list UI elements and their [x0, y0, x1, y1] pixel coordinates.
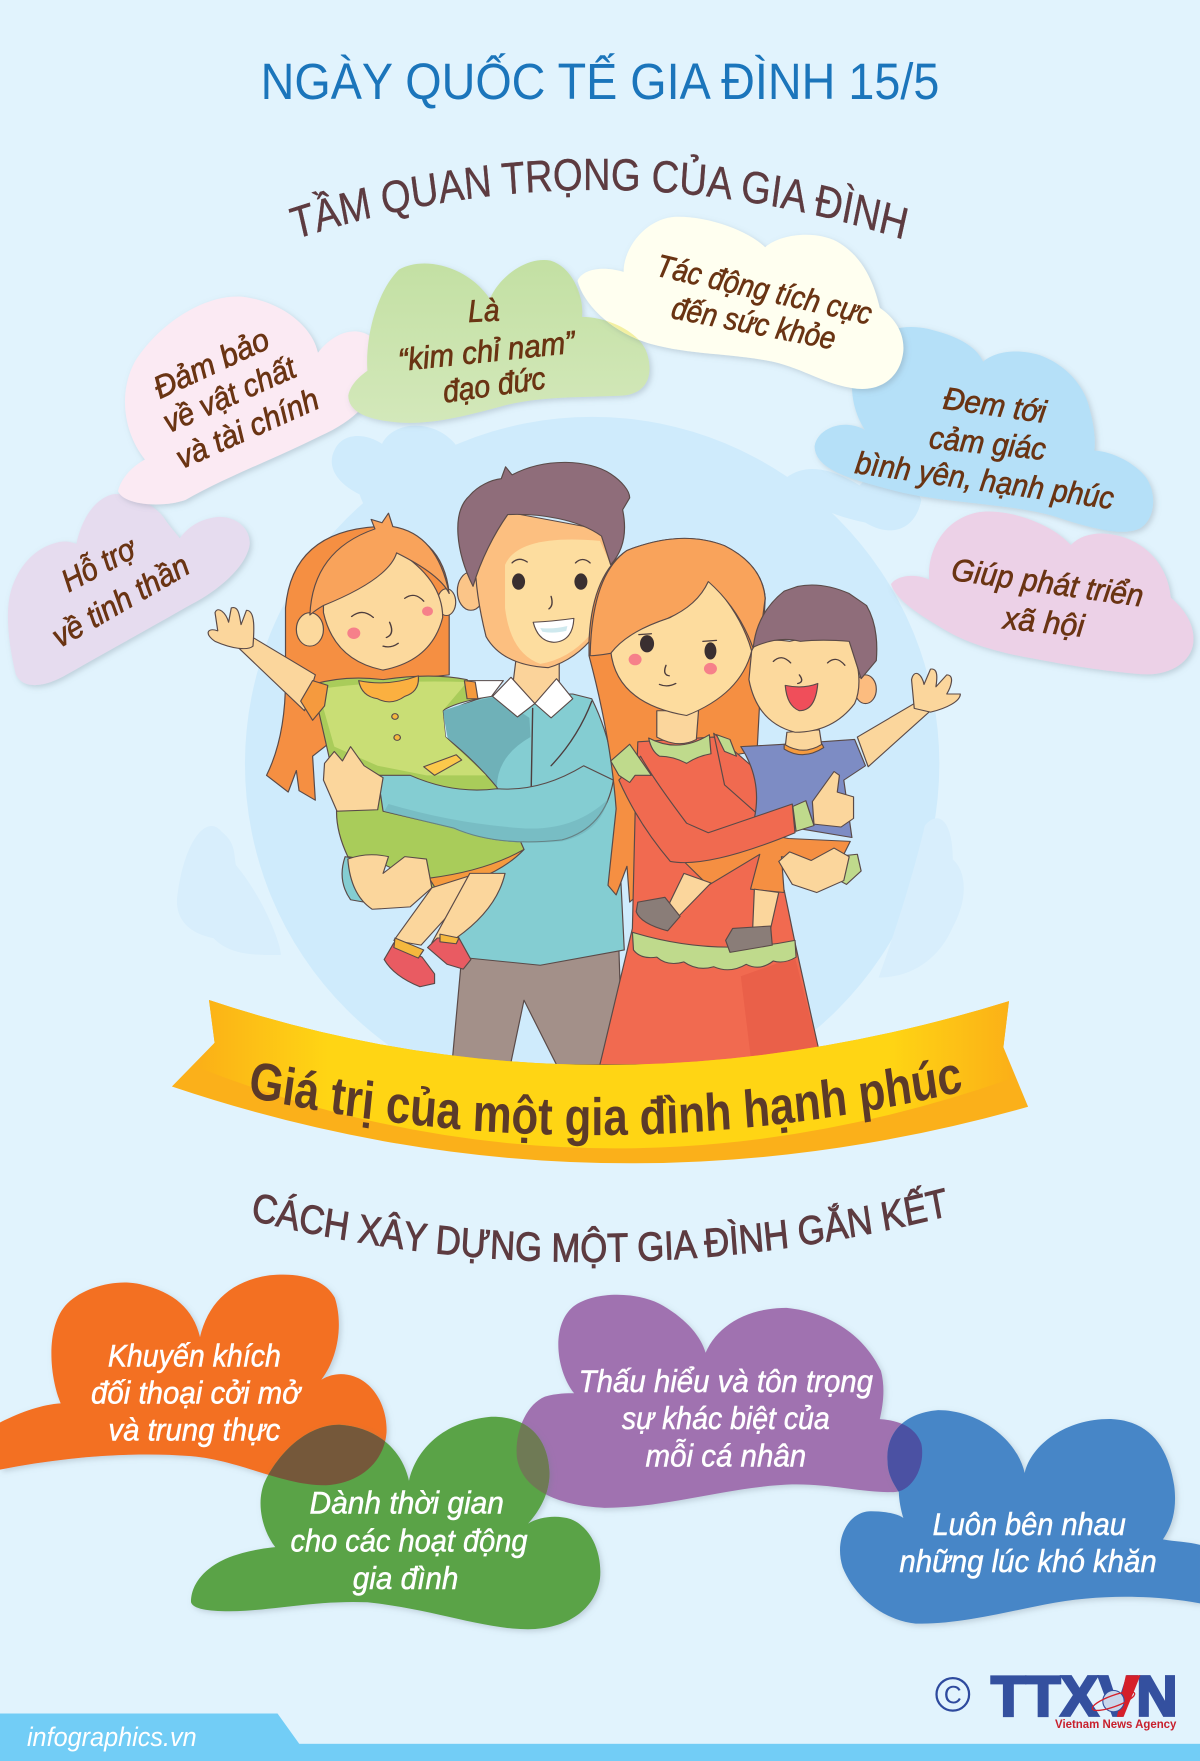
cloud: understanding differences: [517, 1295, 922, 1508]
cloud: understanding differences: mỗi cá nhân: [646, 1438, 806, 1473]
cloud: positive health impact: đến sức khỏe: [669, 290, 839, 356]
cloud: spend time on family activities: gia đình: [353, 1561, 458, 1596]
boy: [636, 585, 960, 952]
logo: TTXVN with copyright: TTXVN: [991, 1665, 1178, 1728]
logo: TTXVN with copyright: C: [944, 1682, 962, 1709]
cloud: understanding differences: sự khác biệt của: [622, 1401, 830, 1436]
cloud: peace and happiness: [815, 327, 1153, 532]
cloud: spend time on family activities: cho các hoạt động: [290, 1524, 528, 1559]
cloud: peace and happiness: Đem tới: [941, 381, 1049, 430]
cloud: social development: [891, 512, 1194, 674]
cloud: moral compass: [348, 260, 650, 423]
banner ribbon: [172, 1000, 1028, 1164]
father: [443, 462, 630, 1065]
title: NGÀY QUỐC TẾ GIA ĐÌNH 15/5: [261, 53, 939, 110]
cloud: encourage open dialogue: và trung thực: [108, 1412, 281, 1447]
cloud: moral compass: Là: [467, 293, 500, 329]
father's hands and arm: [323, 747, 613, 909]
family illustration: [208, 462, 960, 1065]
girl: [208, 513, 524, 987]
cloud: material and financial security: và tài chính: [171, 382, 324, 476]
cloud: peace and happiness: cảm giác: [928, 420, 1048, 467]
cloud: encourage open dialogue: Khuyến khích: [108, 1338, 281, 1373]
cloud: spend time on family activities: Dành thời gian: [310, 1485, 504, 1520]
cloud: peace and happiness: bình yên, hạnh phúc: [853, 445, 1116, 516]
cloud: understanding differences: Thấu hiểu và tôn trọng: [579, 1364, 874, 1399]
cloud: spiritual support: về tinh thần: [46, 548, 196, 654]
cloud: moral compass: “kim chỉ nam”: [396, 325, 578, 378]
cloud: social development: xã hội: [1000, 600, 1087, 644]
cloud: social development: Giúp phát triển: [949, 552, 1146, 614]
cloud: together in hard times: Luôn bên nhau: [933, 1507, 1126, 1542]
cloud: material and financial security: [118, 297, 382, 504]
background circle with pale clouds: [177, 417, 964, 1111]
cloud: together in hard times: những lúc khó khăn: [899, 1544, 1157, 1579]
heading: importance of family: TẦM QUAN TRỌNG CỦA GIA ĐÌNH: [288, 154, 908, 239]
cloud: together in hard times: [840, 1410, 1200, 1624]
cloud: encourage open dialogue: đối thoại cởi mở: [91, 1375, 303, 1410]
cloud: material and financial security: về vật chất: [158, 350, 302, 440]
heading: how to build a close family: CÁCH XÂY DỰNG MỘT GIA ĐÌNH GẮN KẾT: [254, 1184, 945, 1268]
banner text: Giá trị của một gia đình hạnh phúc: [251, 1060, 962, 1146]
cloud: encourage open dialogue: [0, 1275, 387, 1485]
cloud: spiritual support: [8, 494, 250, 685]
footer band: [0, 1713, 1200, 1761]
mother's arm and hands: [611, 735, 861, 893]
cloud: spend time on family activities: [191, 1417, 600, 1629]
logo: TTXVN with copyright: Vietnam News Agency: [1055, 1718, 1177, 1731]
cloud: positive health impact: [578, 217, 903, 389]
cloud: moral compass: đạo đức: [440, 361, 548, 410]
mother: [589, 538, 822, 1065]
cloud: spiritual support: Hỗ trợ: [56, 530, 144, 599]
cloud: material and financial security: Đảm bảo: [148, 322, 275, 405]
cloud: positive health impact: Tác động tích cực: [653, 248, 876, 332]
footer text: infographics.vn: [27, 1722, 197, 1752]
